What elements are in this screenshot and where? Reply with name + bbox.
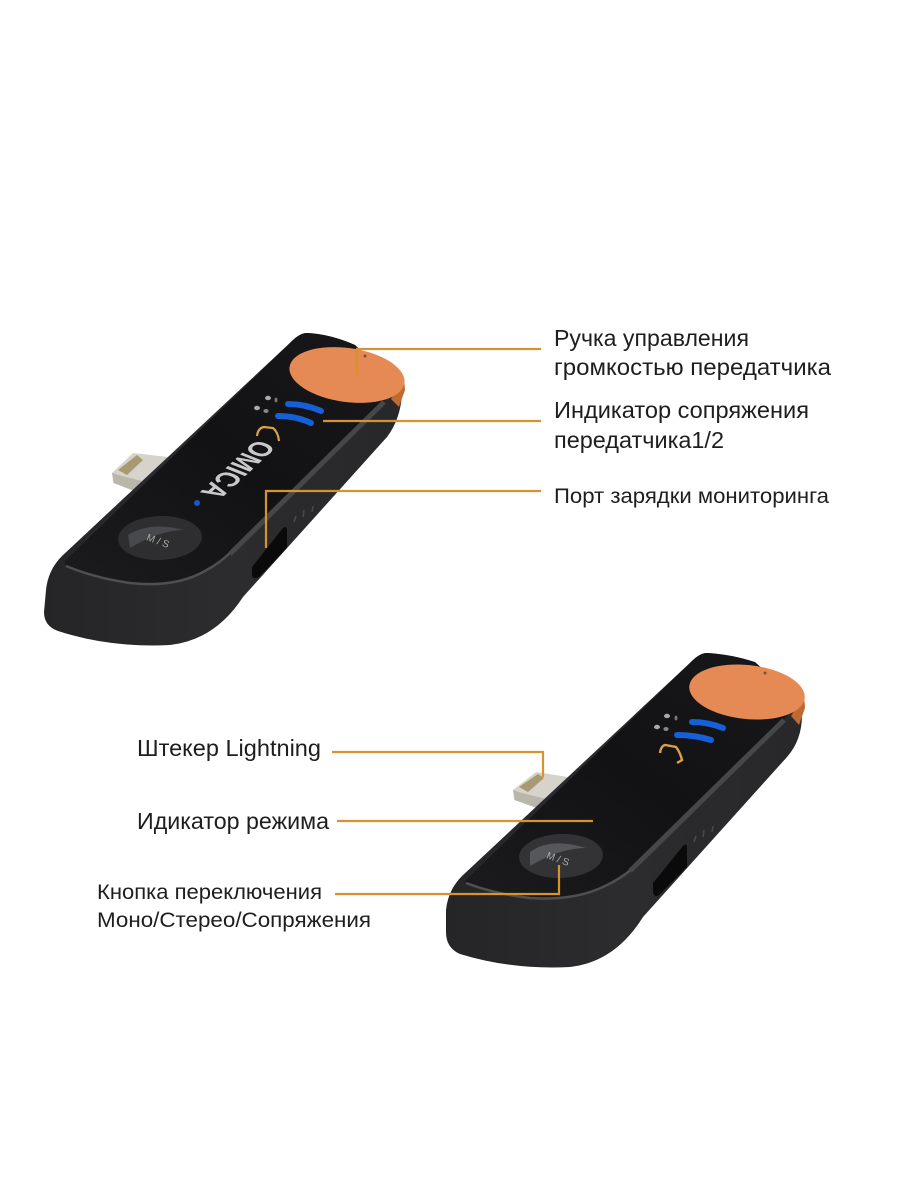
M/S button xyxy=(117,515,203,561)
label: switch button line 2: Моно/Стерео/Сопряжения xyxy=(97,909,371,932)
label: lightning plug: Штекер Lightning xyxy=(137,735,321,761)
mode indicator dot xyxy=(194,500,200,506)
label: pairing indicator: Индикатор сопряжения xyxy=(554,397,809,423)
leader line: mode indicator xyxy=(337,820,593,822)
volume knob xyxy=(686,659,808,725)
M/S button xyxy=(518,833,604,879)
COMICA logo: OMICA xyxy=(193,436,283,503)
M/S button: M / S xyxy=(545,851,571,869)
receiver body xyxy=(44,333,402,645)
leader line: volume knob xyxy=(357,349,541,375)
label: monitoring port: Порт зарядки мониторинга xyxy=(554,485,829,508)
receiver body xyxy=(446,653,802,967)
leader line: switch button xyxy=(335,865,559,894)
side markings xyxy=(294,506,313,522)
lightning connector xyxy=(513,772,568,808)
device: top receiver with logo xyxy=(44,333,408,645)
leader line: monitoring port xyxy=(266,491,541,548)
volume knob xyxy=(286,340,408,410)
charging port xyxy=(653,844,687,896)
M/S button: M / S xyxy=(145,533,171,551)
side markings xyxy=(694,826,713,842)
leader line: pairing indicator xyxy=(323,420,541,422)
label: mode indicator: Идикатор режима xyxy=(137,808,329,834)
top face xyxy=(464,653,800,898)
leader line: lightning plug xyxy=(332,752,543,777)
pairing indicators xyxy=(654,714,723,740)
lightning connector xyxy=(112,453,168,492)
label: volume knob: Ручка управления xyxy=(554,325,749,351)
logo arch mark xyxy=(660,745,682,763)
monitoring port xyxy=(252,527,287,578)
top face xyxy=(64,333,400,584)
label: volume knob line 2: громкостью передатчика xyxy=(554,354,831,380)
label: switch button: Кнопка переключения xyxy=(97,881,322,904)
pairing indicators xyxy=(254,396,321,423)
device: lower receiver xyxy=(446,653,808,967)
label: pairing indicator line 2: передатчика1/2 xyxy=(554,427,724,453)
